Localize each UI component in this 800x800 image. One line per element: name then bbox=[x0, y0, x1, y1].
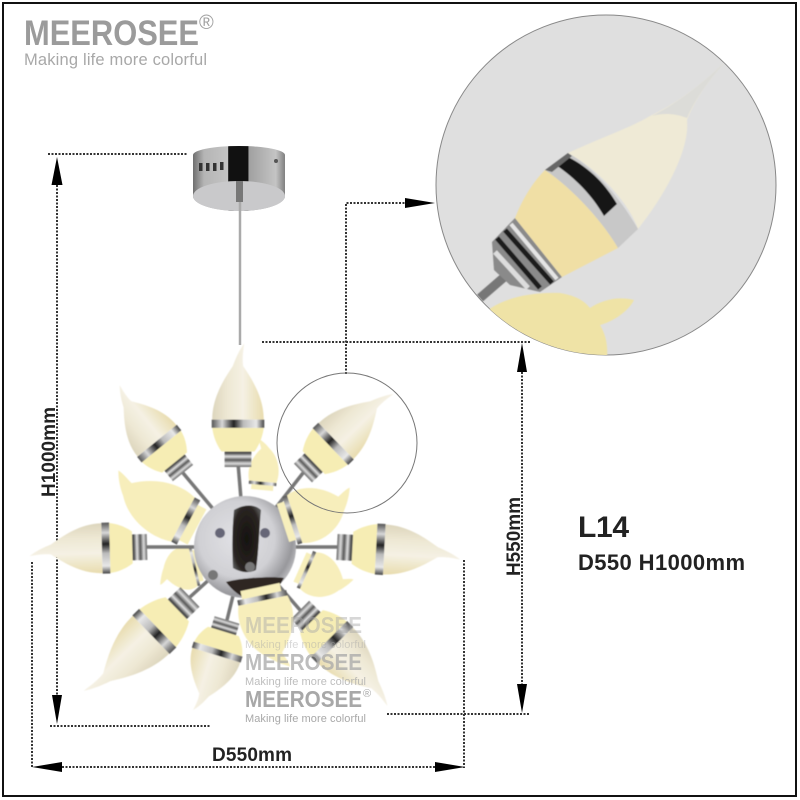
watermark logos bbox=[245, 612, 371, 725]
stem bbox=[480, 272, 510, 298]
dimension: drop height H550mm bbox=[262, 342, 530, 714]
zoomed detail circle bbox=[436, 15, 776, 360]
product code: L14 bbox=[578, 511, 629, 544]
dimension: overall height H1000mm: H1000mm bbox=[39, 407, 60, 497]
brand logo bbox=[24, 12, 214, 69]
lower watermark: ® bbox=[363, 688, 371, 700]
faint upper watermark bbox=[245, 612, 366, 651]
middle watermark bbox=[245, 649, 366, 688]
dimension: drop height H550mm: H550mm bbox=[504, 497, 525, 576]
dimension: diameter D550mm bbox=[32, 560, 465, 772]
lower neighbouring bulb bbox=[488, 293, 634, 360]
clear glass tip bbox=[568, 114, 688, 228]
middle watermark: MEEROSEE bbox=[245, 649, 362, 675]
brand logo: ® bbox=[199, 12, 214, 34]
lower watermark bbox=[245, 686, 371, 725]
brand logo: Making life more colorful bbox=[24, 51, 207, 69]
detail leader arrow bbox=[346, 198, 435, 374]
lower watermark: MEEROSEE bbox=[245, 686, 362, 712]
chrome band bbox=[545, 153, 638, 248]
faint upper watermark: MEEROSEE bbox=[245, 612, 362, 638]
product code bbox=[578, 511, 745, 575]
central chrome sphere bbox=[194, 496, 296, 601]
product code: D550 H1000mm bbox=[578, 550, 745, 575]
chandelier bbox=[29, 343, 462, 720]
faint upper watermark: Making life more colorful bbox=[245, 639, 366, 651]
ceiling canopy bbox=[193, 146, 285, 211]
suspension cable bbox=[239, 202, 241, 345]
lower watermark: Making life more colorful bbox=[245, 713, 366, 725]
arm stems bbox=[147, 463, 337, 620]
dimension: overall height H1000mm bbox=[39, 154, 210, 726]
back bulbs bbox=[153, 438, 358, 609]
front bulbs bbox=[29, 343, 462, 720]
middle watermark: Making life more colorful bbox=[245, 676, 366, 688]
brand logo: MEEROSEE bbox=[24, 14, 199, 53]
screw collar bbox=[492, 218, 562, 292]
detail marker circle bbox=[277, 373, 417, 513]
dimension: diameter D550mm: D550mm bbox=[212, 745, 292, 766]
frosted yellow section bbox=[515, 170, 618, 277]
